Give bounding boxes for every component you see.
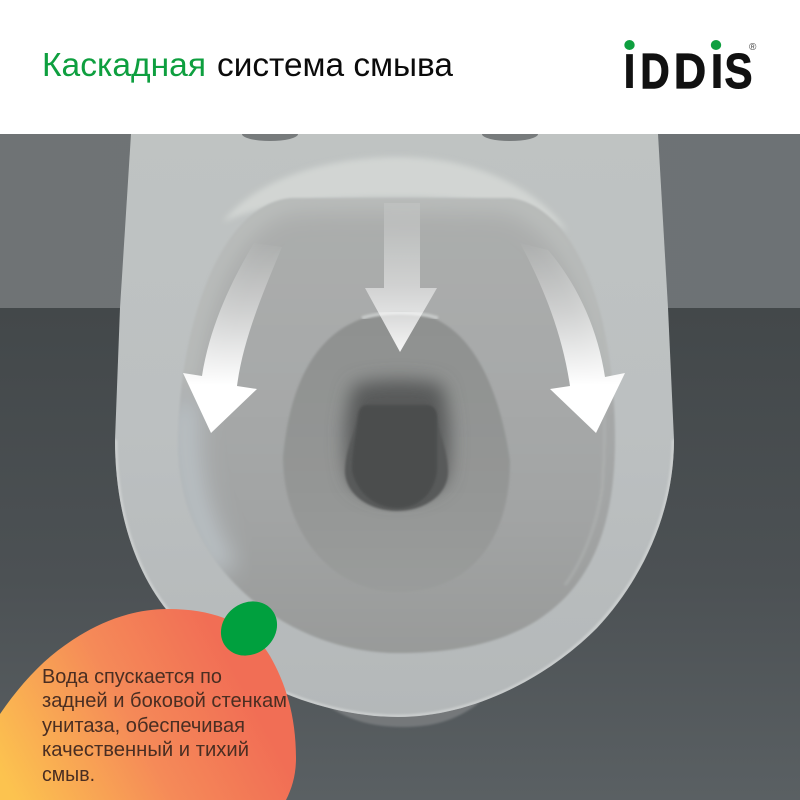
seat fixing holes	[242, 134, 538, 141]
title: Каскадная	[42, 46, 206, 83]
logo: IDDIS: S	[724, 45, 752, 99]
title	[42, 46, 454, 83]
callout background	[0, 609, 296, 800]
callout text: Вода спускается по	[42, 665, 222, 688]
bowl left glaze	[185, 400, 225, 570]
logo: IDDIS: I	[710, 45, 724, 99]
callout text: унитаза, обеспечивая	[42, 714, 245, 737]
logo: IDDIS: I	[623, 45, 636, 99]
callout text	[42, 665, 287, 786]
callout text: смыв.	[42, 763, 95, 786]
arrow: centre	[365, 203, 437, 352]
toilet body	[115, 134, 674, 717]
bowl upper edge glaze	[185, 197, 612, 390]
body edge highlight	[116, 440, 673, 716]
bowl right inner line	[566, 550, 585, 584]
arrow: left	[183, 243, 282, 433]
logo: IDDIS: D	[674, 45, 706, 99]
header background	[0, 0, 800, 134]
upper rim highlight	[228, 156, 562, 226]
toilet underside shadow	[320, 700, 480, 727]
background: floor	[0, 308, 800, 800]
drain funnel shadow	[345, 380, 449, 499]
green accent oval	[210, 590, 288, 667]
drain hole	[344, 433, 449, 512]
water pool	[283, 316, 510, 552]
background: wall	[0, 134, 800, 308]
arrow: right	[520, 243, 625, 433]
bowl	[170, 190, 620, 660]
drain hole core	[352, 405, 437, 508]
logo: IDDIS	[623, 40, 757, 99]
callout text: качественный и тихий	[42, 738, 249, 761]
title: система смыва	[217, 46, 454, 83]
logo: IDDIS: D	[640, 45, 670, 99]
toilet photo illustration	[115, 127, 674, 727]
pool top lip highlight	[362, 313, 438, 318]
callout	[0, 609, 296, 800]
logo: IDDIS: ®	[749, 42, 757, 53]
callout text: задней и боковой стенкам	[42, 689, 287, 712]
